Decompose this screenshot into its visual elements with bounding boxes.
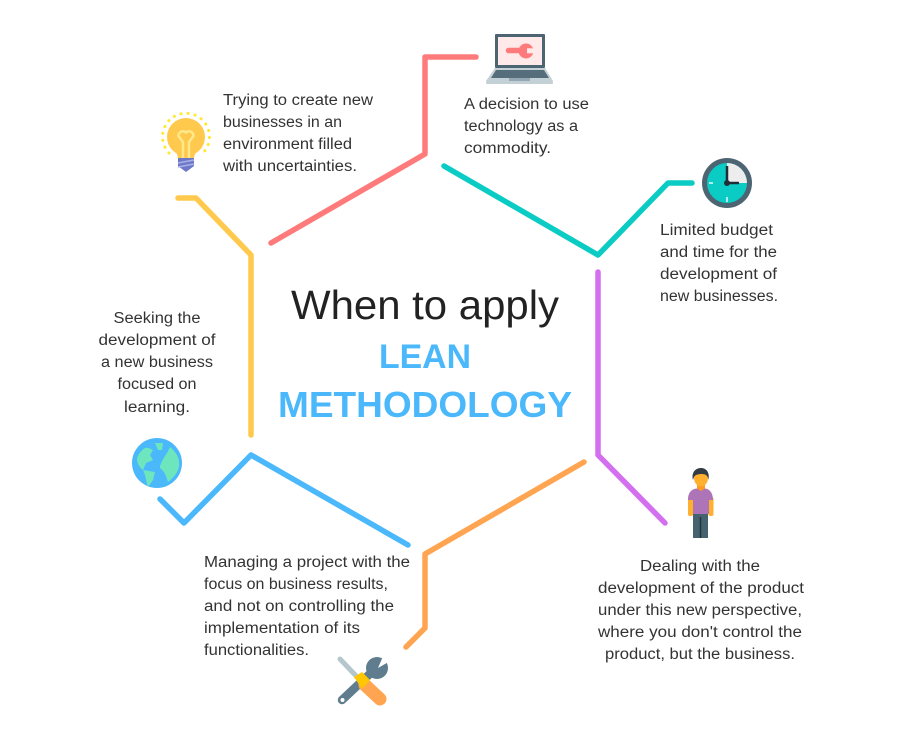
connector: yellow line <box>178 198 251 435</box>
text: focused on learning <box>98 310 216 416</box>
icon: wrench and screwdriver <box>340 654 392 702</box>
title: METHODOLOGY <box>278 384 572 425</box>
text: limited budget: new businesses. <box>660 288 778 305</box>
icon: person <box>688 468 714 538</box>
text: limited budget: and time for the <box>660 244 777 261</box>
text: managing a project: and not on controlling the <box>204 598 394 615</box>
text: dealing with the product: Dealing with the <box>640 558 760 575</box>
icon: light bulb <box>162 113 209 172</box>
text: managing a project <box>204 554 410 659</box>
text: dealing with the product: under this new perspective, <box>598 602 802 619</box>
icon: laptop <box>486 34 553 84</box>
text: limited budget: development of <box>660 266 778 283</box>
connector: purple line <box>598 272 665 523</box>
text: managing a project: functionalities. <box>204 642 309 659</box>
text: focused on learning: a new business <box>101 354 213 371</box>
text: uncertain environment: businesses in an <box>223 114 342 131</box>
text: uncertain environment: environment filled <box>223 136 352 153</box>
text: uncertain environment: with uncertainties. <box>222 158 357 175</box>
icon: clock <box>702 158 752 208</box>
title: When to apply <box>291 282 559 328</box>
text: limited budget: Limited budget <box>660 222 774 239</box>
text: technology decision: A decision to use <box>464 96 589 113</box>
text: focused on learning: learning. <box>124 399 190 416</box>
title <box>278 282 572 425</box>
text: technology decision: technology as a <box>464 118 578 135</box>
text: uncertain environment: Trying to create new <box>223 92 374 109</box>
text: managing a project: implementation of its <box>204 620 360 637</box>
text: limited budget <box>660 222 778 305</box>
text: dealing with the product: development of the product <box>598 580 805 597</box>
text: uncertain environment <box>222 92 374 175</box>
text: focused on learning: focused on <box>118 376 196 393</box>
text: technology decision: commodity. <box>464 140 551 157</box>
connector: teal line <box>444 166 692 255</box>
text: managing a project: Managing a project with the <box>204 554 410 571</box>
text: dealing with the product <box>597 558 805 663</box>
text: technology decision <box>464 96 589 157</box>
text: managing a project: focus on business results, <box>204 576 388 593</box>
connector: orange line <box>406 462 584 647</box>
text: focused on learning: development of <box>98 332 216 349</box>
connector: blue line <box>160 455 408 545</box>
text: dealing with the product: product, but the business. <box>605 646 795 663</box>
text: dealing with the product: where you don't control the <box>597 624 802 641</box>
icon: globe <box>132 438 182 488</box>
title: LEAN <box>379 338 471 376</box>
text: focused on learning: Seeking the <box>114 310 200 327</box>
connector: red line <box>271 57 476 243</box>
